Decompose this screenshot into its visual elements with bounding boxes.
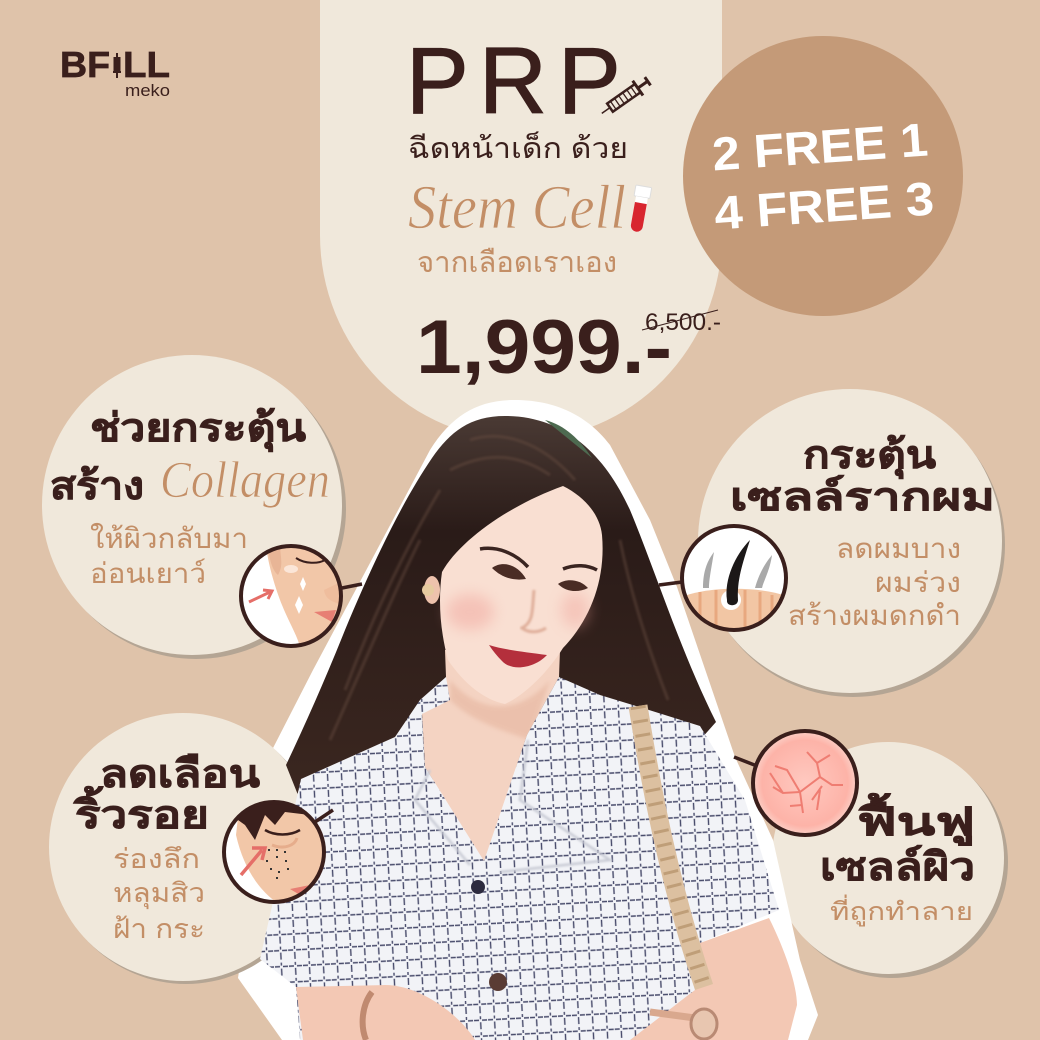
text: wrinkle detail: ร่องลึก bbox=[113, 844, 200, 874]
face bbox=[440, 486, 603, 704]
text: hair root heading: เซลล์รากผม bbox=[730, 474, 995, 519]
hair strands bbox=[330, 436, 668, 740]
eyes bbox=[492, 564, 526, 580]
script heading: Stem Cell: Stem Cell bbox=[408, 174, 626, 242]
text: wrinkle detail: หลุมสิว bbox=[113, 878, 205, 910]
text: skin renewal heading: เซลล์ผิว bbox=[820, 844, 975, 889]
shirt bbox=[260, 677, 779, 1040]
text: skin renewal detail: ที่ถูกทำลาย bbox=[830, 894, 973, 927]
text: collagen heading bbox=[50, 407, 330, 509]
icon: hair follicle bbox=[659, 526, 795, 640]
collar shadow bbox=[415, 740, 610, 872]
bracelet bbox=[363, 992, 372, 1040]
logo: BFILL meko: meko bbox=[125, 81, 170, 100]
text: hair root detail: สร้างผมดกดำ bbox=[788, 600, 961, 631]
logo: BFILL meko: BF bbox=[60, 44, 110, 85]
white cut-out outline behind the model bbox=[238, 400, 818, 1040]
right arm and hand bbox=[630, 918, 797, 1040]
icon: damaged skin bbox=[734, 731, 857, 835]
eyebrows bbox=[480, 548, 528, 567]
text: collagen heading: สร้าง bbox=[50, 465, 144, 508]
text: wrinkle heading: ริ้วรอย bbox=[73, 786, 209, 837]
text: collagen detail: อ่อนเยาว์ bbox=[90, 558, 206, 589]
panel: hair root circle bbox=[698, 389, 1005, 697]
text: skin renewal heading: ฟื้นฟู bbox=[857, 793, 975, 846]
watch bbox=[650, 1012, 695, 1018]
text: collagen heading: Collagen bbox=[160, 452, 330, 509]
earring bbox=[422, 584, 434, 596]
text: hair root heading bbox=[730, 434, 995, 519]
text: collagen detail bbox=[90, 522, 248, 589]
text: wrinkle heading bbox=[73, 753, 260, 837]
text: hair root heading: กระตุ้น bbox=[803, 434, 936, 479]
ear bbox=[424, 576, 440, 604]
text: collagen heading: ช่วยกระตุ้น bbox=[90, 407, 306, 452]
lips bbox=[489, 645, 547, 667]
text: collagen detail: ให้ผิวกลับมา bbox=[90, 522, 248, 554]
text: hair root detail bbox=[788, 533, 961, 631]
icon: collagen face bbox=[241, 545, 362, 650]
text: hair root detail: ผมร่วง bbox=[875, 567, 961, 598]
text: skin renewal heading bbox=[820, 793, 975, 889]
subheading: inject: ฉีดหน้าเด็ก ด้วย bbox=[408, 130, 628, 165]
panel: wrinkle circle bbox=[49, 713, 320, 984]
blush bbox=[446, 594, 494, 630]
logo: BFILL meko: LL bbox=[123, 44, 170, 85]
panel: collagen circle bbox=[42, 355, 346, 659]
icon: blood tube bbox=[628, 185, 652, 233]
logo: BFILL meko bbox=[60, 44, 170, 100]
promotion: 4 free 3: 4 FREE 3 bbox=[712, 171, 936, 240]
nose bbox=[522, 590, 546, 632]
photo: model bbox=[260, 416, 797, 1040]
price: current: 1,999.- bbox=[416, 305, 672, 390]
panel: free promotion circle bbox=[683, 36, 963, 316]
text: wrinkle detail bbox=[113, 844, 205, 944]
text: wrinkle heading: ลดเลือน bbox=[100, 753, 260, 796]
panel: skin renewal circle bbox=[772, 742, 1008, 978]
buttons bbox=[471, 880, 485, 894]
promotion: 2 free 1: 2 FREE 1 bbox=[710, 113, 930, 180]
subheading: from own blood: จากเลือดเราเอง bbox=[417, 247, 617, 279]
price: old struck through: 6,500.- bbox=[645, 309, 721, 336]
text: hair root detail: ลดผมบาง bbox=[836, 533, 961, 564]
hair bbox=[286, 416, 716, 800]
left arm and hand bbox=[296, 985, 475, 1040]
bag strap bbox=[638, 706, 704, 987]
text: wrinkle detail: ฝ้า กระ bbox=[113, 914, 205, 944]
icon: wrinkle face bbox=[224, 800, 333, 905]
panel: top centre arch bbox=[320, 0, 722, 440]
heading: PRP: PRP bbox=[406, 28, 621, 133]
icon: syringe bbox=[597, 74, 653, 121]
neck and chest bbox=[422, 650, 560, 862]
